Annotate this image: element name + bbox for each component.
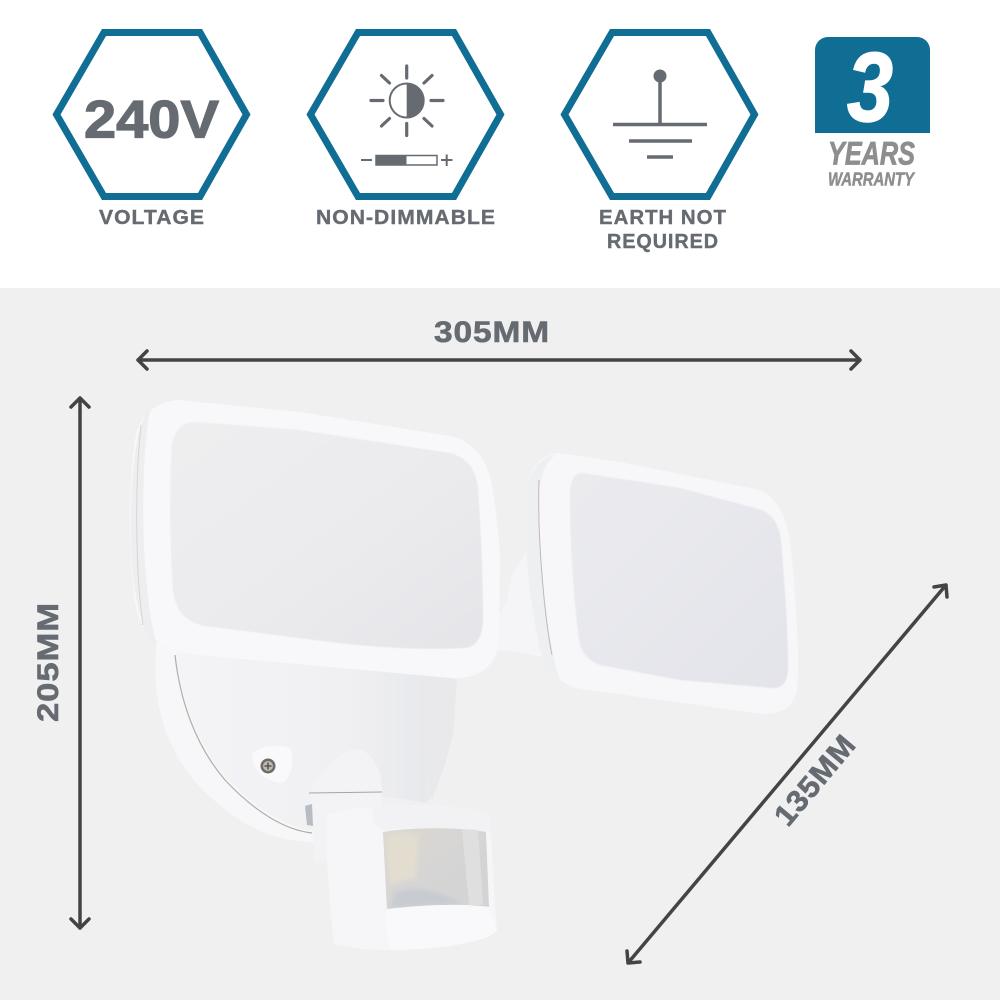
- mounting screw: [252, 746, 292, 783]
- icon: brightness slider: [361, 154, 452, 166]
- wall plate and body: [155, 640, 457, 842]
- badge: non-dimmable: NON-DIMMABLE: [316, 206, 496, 229]
- product photo: twin head security light: [130, 400, 798, 950]
- motion sensor: [305, 749, 497, 950]
- badge: 3 years warranty: [815, 32, 930, 190]
- large lamp head: [130, 400, 500, 678]
- connecting arm: [496, 545, 555, 660]
- icon: earth symbol: [613, 70, 707, 157]
- badge: 3 years warranty: YEARS: [828, 136, 916, 172]
- dimension: depth: 135MM: [768, 729, 863, 832]
- lamp diffuser: [570, 473, 788, 688]
- badge: voltage: 240V: [84, 90, 219, 150]
- badge: non-dimmable: [310, 32, 500, 229]
- dimension: width: 305MM: [434, 316, 550, 349]
- panel: product dimensions: [0, 288, 1000, 1000]
- dimension: height: 205MM: [32, 602, 65, 722]
- badge: voltage: [56, 32, 246, 229]
- panel: specification icons: [0, 0, 1000, 288]
- badge: earth not required: [564, 32, 754, 253]
- small lamp head: [525, 453, 798, 714]
- dimension: depth: [627, 585, 947, 963]
- dimension: height: [32, 398, 89, 928]
- icon: half sun brightness: [371, 66, 443, 136]
- dimension: width: [138, 316, 860, 369]
- sensor housing: [327, 805, 497, 950]
- sensor lens: [383, 828, 489, 910]
- sensor neck: [310, 749, 382, 863]
- badge: earth not required: EARTH NOT: [599, 206, 727, 229]
- badge: 3 years warranty: WARRANTY: [828, 168, 915, 190]
- badge: earth not required: REQUIRED: [607, 230, 719, 253]
- badge: 3 years warranty: 3: [847, 32, 893, 142]
- lamp diffuser: [170, 422, 483, 649]
- badge: voltage: VOLTAGE: [99, 206, 205, 229]
